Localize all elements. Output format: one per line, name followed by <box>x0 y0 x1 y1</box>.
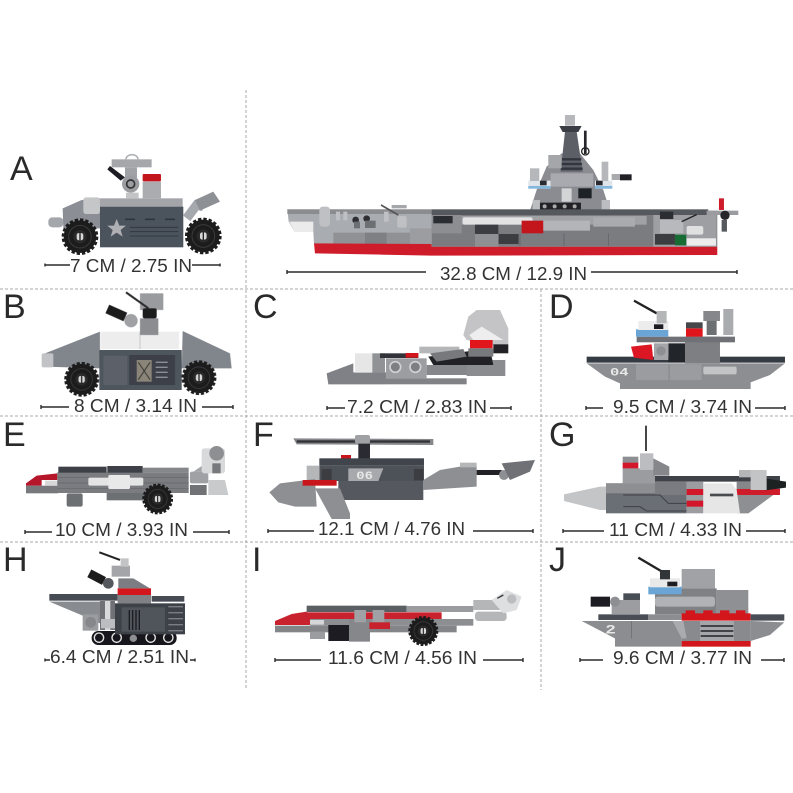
dimension D <box>586 397 785 417</box>
vehicle D: ship <box>587 301 785 389</box>
dimension G <box>563 520 785 540</box>
label J: J <box>549 541 566 579</box>
hull number 2: 2 <box>605 623 616 638</box>
label G: G <box>549 416 575 454</box>
dimension carrier <box>287 264 737 284</box>
panel: aircraft carrier <box>287 115 738 284</box>
vehicle G: boat <box>564 426 786 513</box>
vehicle E: jet with wheel <box>26 446 228 513</box>
label H: H <box>3 541 28 579</box>
dimension carrier: 32.8 CM / 12.9 IN <box>440 264 587 284</box>
dimension E <box>25 520 229 540</box>
dimension J: 9.6 CM / 3.77 IN <box>613 648 752 668</box>
label B: B <box>3 288 26 326</box>
dimension G: 11 CM / 4.33 IN <box>609 520 742 540</box>
dimension F: 12.1 CM / 4.76 IN <box>318 519 465 539</box>
label A: A <box>10 150 33 188</box>
vehicle B: armoured car <box>42 292 232 395</box>
label E: E <box>3 416 26 454</box>
side number 06: 06 <box>356 471 373 483</box>
label D: D <box>549 288 574 326</box>
dimension H: 6.4 CM / 2.51 IN <box>50 647 189 667</box>
label F: F <box>253 416 274 454</box>
vehicle: aircraft carrier <box>287 115 738 256</box>
panel: vehicle C <box>253 288 511 417</box>
panel: vehicle J <box>549 541 784 668</box>
hull number 04: 04 <box>610 368 629 380</box>
vehicle H: tracked vehicle <box>49 552 185 645</box>
panel: vehicle H <box>3 541 195 667</box>
label I: I <box>252 541 261 579</box>
dimension A <box>45 256 220 276</box>
dimension A: 7 CM / 2.75 IN <box>70 256 192 276</box>
dimension E: 10 CM / 3.93 IN <box>55 520 188 540</box>
panel: vehicle B <box>3 288 233 416</box>
dimension C: 7.2 CM / 2.83 IN <box>347 397 487 417</box>
vehicle C: jet <box>327 310 508 384</box>
panel: vehicle I <box>252 541 523 668</box>
panel: vehicle A <box>10 150 220 276</box>
dimension I: 11.6 CM / 4.56 IN <box>328 648 477 668</box>
vehicle A: armoured car with star <box>48 155 220 254</box>
dimension B <box>41 396 233 416</box>
panel: vehicle G <box>549 416 786 540</box>
panel: vehicle D <box>549 288 785 417</box>
dimension D: 9.5 CM / 3.74 IN <box>613 397 752 417</box>
dimension J <box>580 648 784 668</box>
vehicle I: jet with wheel <box>275 590 522 645</box>
vehicle F: helicopter <box>269 435 535 519</box>
vehicle J: ship <box>582 558 784 647</box>
dimension B: 8 CM / 3.14 IN <box>74 396 197 416</box>
label C: C <box>253 288 278 326</box>
panel: vehicle F <box>253 416 535 539</box>
panel: vehicle E <box>3 416 229 540</box>
dimension F <box>268 519 533 539</box>
dimension I <box>275 648 523 668</box>
